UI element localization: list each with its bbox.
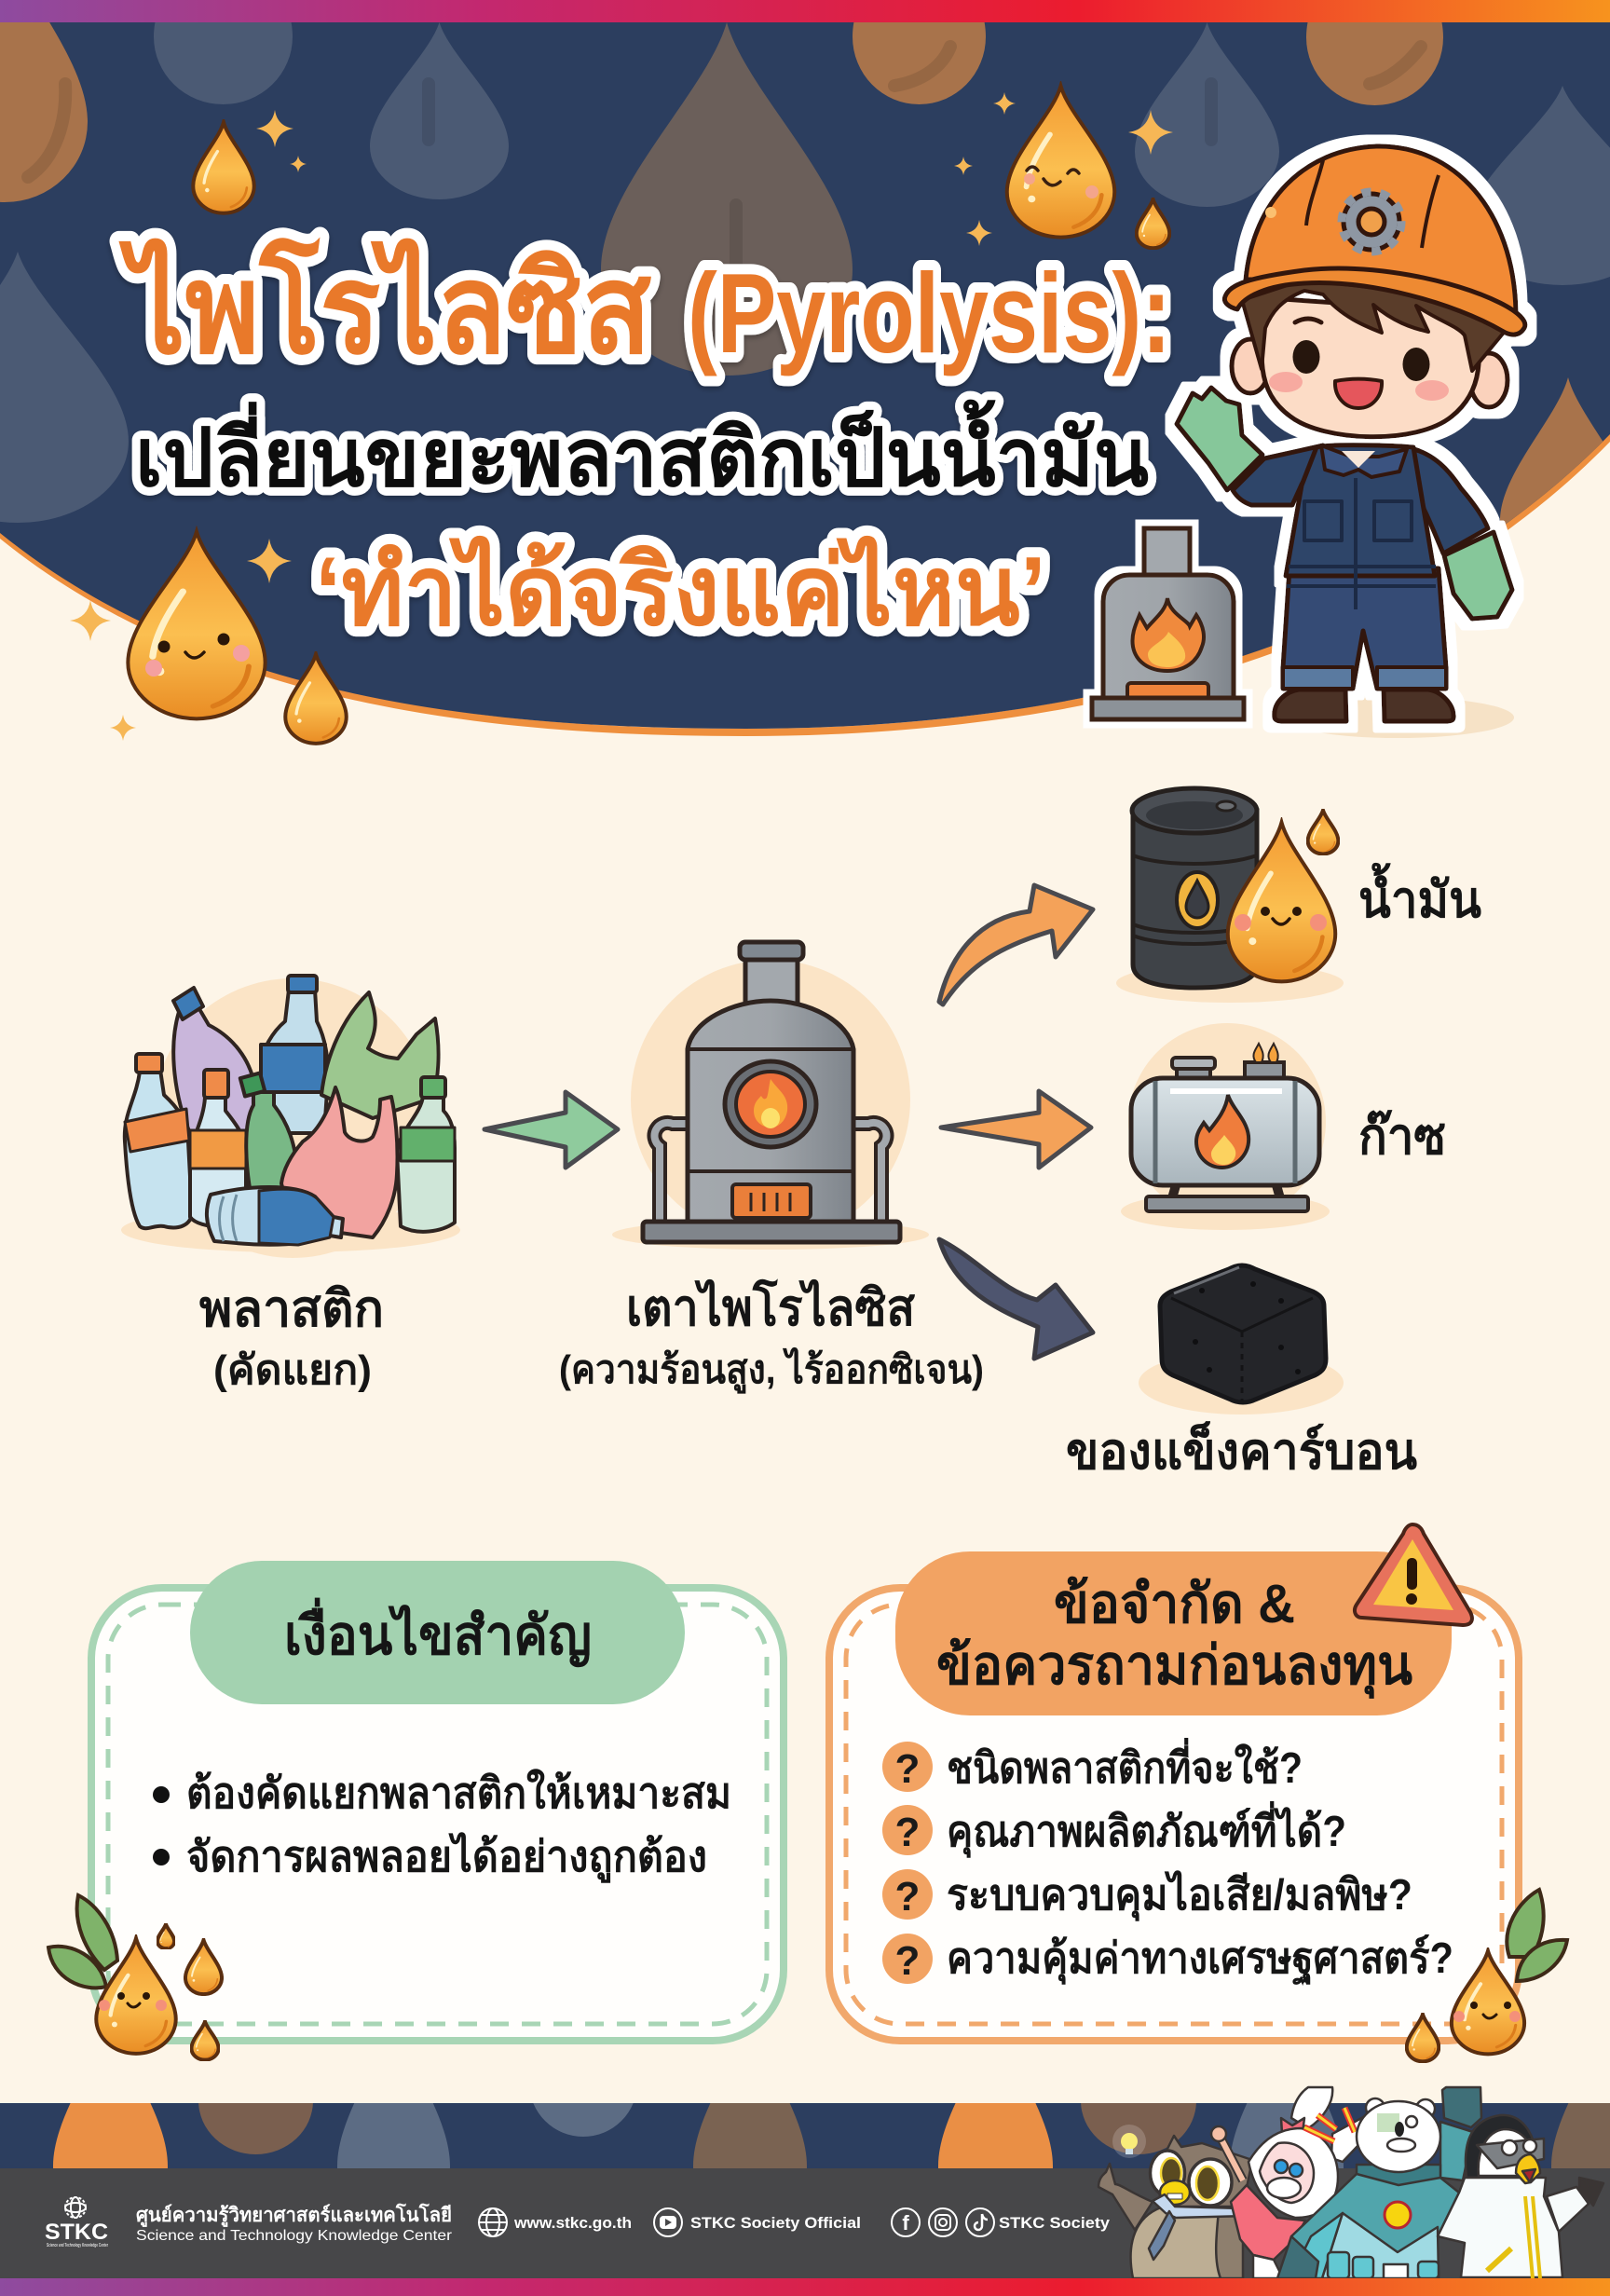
- heading pill: [895, 1551, 1452, 1715]
- arrow: plastics to furnace: [484, 1092, 618, 1168]
- left arm: [1233, 445, 1323, 505]
- footer: youtube: STKC Society Official: [690, 2214, 861, 2232]
- icon: warning sign: [1355, 1524, 1472, 1625]
- heading: เงื่อนไขสำคัญ: [284, 1597, 592, 1667]
- furnace illustration: [612, 942, 929, 1250]
- question 1: [882, 1738, 1303, 1792]
- purple bottle: [173, 1003, 255, 1133]
- icon: smiling drop top right: [1007, 86, 1114, 238]
- plastics pile: [121, 976, 460, 1258]
- question 1: ชนิดพลาสติกที่จะใช้?: [947, 1738, 1303, 1792]
- header banner: [0, 0, 1610, 736]
- heading: [936, 1574, 1412, 1700]
- footer logo: Science and Technology Knowledge Center: [47, 2243, 108, 2248]
- eyes: [1293, 340, 1319, 374]
- process flow: [121, 788, 1481, 1480]
- right arm: [1407, 447, 1488, 554]
- face: [1262, 298, 1479, 437]
- footer: centre name: ศูนย์ความรู้วิทยาศาสตร์และเทคโนโลยี: [136, 2203, 452, 2228]
- arrow: to gas: [941, 1091, 1091, 1168]
- question 2: [882, 1801, 1346, 1858]
- title line 1: ไพโรไลซิส: [118, 237, 651, 379]
- right glove: [1444, 532, 1512, 619]
- question 2: ?: [895, 1810, 920, 1855]
- footer bar: [0, 2168, 1610, 2278]
- green bottle: [246, 1092, 298, 1198]
- question 3: ?: [895, 1874, 920, 1920]
- question 2: คุณภาพผลิตภัณฑ์ที่ได้?: [947, 1801, 1346, 1858]
- question 1: ?: [895, 1746, 920, 1792]
- label: pyrolysis furnace: เตาไพโรไลซิส: [626, 1278, 915, 1336]
- gear badge: [1342, 192, 1401, 252]
- orange label bottle: [190, 1098, 246, 1226]
- bottom gradient bar: [0, 2278, 1610, 2296]
- footer logo: STKC: [45, 2220, 108, 2245]
- blue bottle: [261, 990, 328, 1133]
- background oil drops: [0, 0, 1610, 582]
- footer: social: f: [902, 2211, 909, 2234]
- green bag: [321, 992, 439, 1118]
- sparkles: [70, 92, 1173, 741]
- hair: [1242, 280, 1508, 371]
- label: oil: น้ำมัน: [1358, 863, 1481, 928]
- footer: social: [892, 2208, 1111, 2236]
- top gradient bar: [0, 0, 1610, 22]
- pale left bottle: [125, 1070, 192, 1228]
- waving glove: [1177, 388, 1262, 490]
- mouth: [1335, 379, 1382, 408]
- helmet dome: [1246, 146, 1516, 312]
- footer: centre name: [136, 2203, 453, 2244]
- label: sorted: (คัดแยก): [213, 1347, 372, 1393]
- arrow: to oil: [939, 885, 1093, 1004]
- panel: key conditions: [91, 1561, 784, 2041]
- question 3: ระบบควบคุมไอเสีย/มลพิษ?: [947, 1870, 1412, 1921]
- icon: small drop top left: [193, 122, 254, 213]
- worker character: [1177, 146, 1525, 721]
- bullet list: ต้องคัดแยกพลาสติกให้เหมาะสม: [186, 1768, 731, 1817]
- bullet list: จัดการผลพลอยได้อย่างถูกต้อง: [186, 1832, 707, 1883]
- worker shadow: [1281, 697, 1514, 738]
- question 4: ?: [895, 1938, 920, 1984]
- mascot: owl: [1098, 2125, 1252, 2278]
- title line 3: ‘ทำได้จริงแค่ไหน’: [315, 536, 1046, 646]
- footer: website: [479, 2208, 632, 2236]
- helmet brim: [1224, 268, 1525, 335]
- cheeks: [1269, 372, 1303, 392]
- icon: drops and leaves left: [48, 1895, 222, 2060]
- heading pill: [190, 1561, 685, 1704]
- question 4: ความคุ้มค่าทางเศรษฐศาสตร์?: [947, 1934, 1453, 1986]
- ears: [1232, 339, 1269, 393]
- footer drop band: [0, 2103, 1610, 2168]
- heading: ข้อควรถามก่อนลงทุน: [936, 1635, 1412, 1700]
- gas tank: [1121, 1023, 1330, 1230]
- footer: centre name: Science and Technology Knowledge Center: [136, 2228, 453, 2244]
- carbon solid block: [1139, 1265, 1344, 1414]
- icon: smiling drop bottom left: [128, 532, 266, 718]
- title line 1: (Pyrolysis):: [688, 250, 1171, 376]
- boots: [1275, 690, 1346, 721]
- panel: limits and questions: [829, 1551, 1519, 2041]
- icon: small drop bottom left: [285, 654, 347, 744]
- label: plastic: พลาสติก: [199, 1281, 384, 1337]
- label: heat no oxygen: (ความร้อนสูง, ไร้ออกซิเจน): [559, 1346, 984, 1394]
- belt and pockets: [1287, 478, 1436, 609]
- icon: tiny drop right: [1137, 199, 1169, 248]
- footer: website: www.stkc.go.th: [513, 2214, 632, 2232]
- eyebrow: [1295, 319, 1321, 322]
- icon: drops and leaves right: [1407, 1890, 1567, 2061]
- heading: ข้อจำกัด &: [1054, 1574, 1295, 1634]
- lying bottle: [207, 1187, 343, 1245]
- arrow: to carbon solid: [939, 1239, 1093, 1359]
- trousers: [1283, 568, 1446, 689]
- footer: youtube: [654, 2208, 861, 2236]
- label: gas: ก๊าซ: [1358, 1109, 1446, 1165]
- collar: [1321, 445, 1407, 477]
- label: carbon solid: ของแข็งคาร์บอน: [1066, 1422, 1417, 1480]
- mascot: polar bear: [1277, 2087, 1481, 2278]
- right bottle: [397, 1096, 455, 1232]
- torso: [1286, 445, 1435, 576]
- bullet list: [153, 1768, 731, 1883]
- oil barrel and drop: [1116, 788, 1344, 1003]
- footer logo: [45, 2197, 108, 2248]
- mini furnace illustration: [1092, 528, 1244, 719]
- title line 1: [118, 237, 1171, 379]
- footer: social: STKC Society: [999, 2214, 1111, 2232]
- mascot: girl in bunny hood: [1211, 2087, 1367, 2278]
- pink bag: [281, 1087, 398, 1237]
- mascot: penguin in lab coat: [1438, 2115, 1603, 2278]
- mascots: [1098, 2087, 1603, 2278]
- title line 2: เปลี่ยนขยะพลาสติกเป็นน้ำมัน: [135, 399, 1149, 503]
